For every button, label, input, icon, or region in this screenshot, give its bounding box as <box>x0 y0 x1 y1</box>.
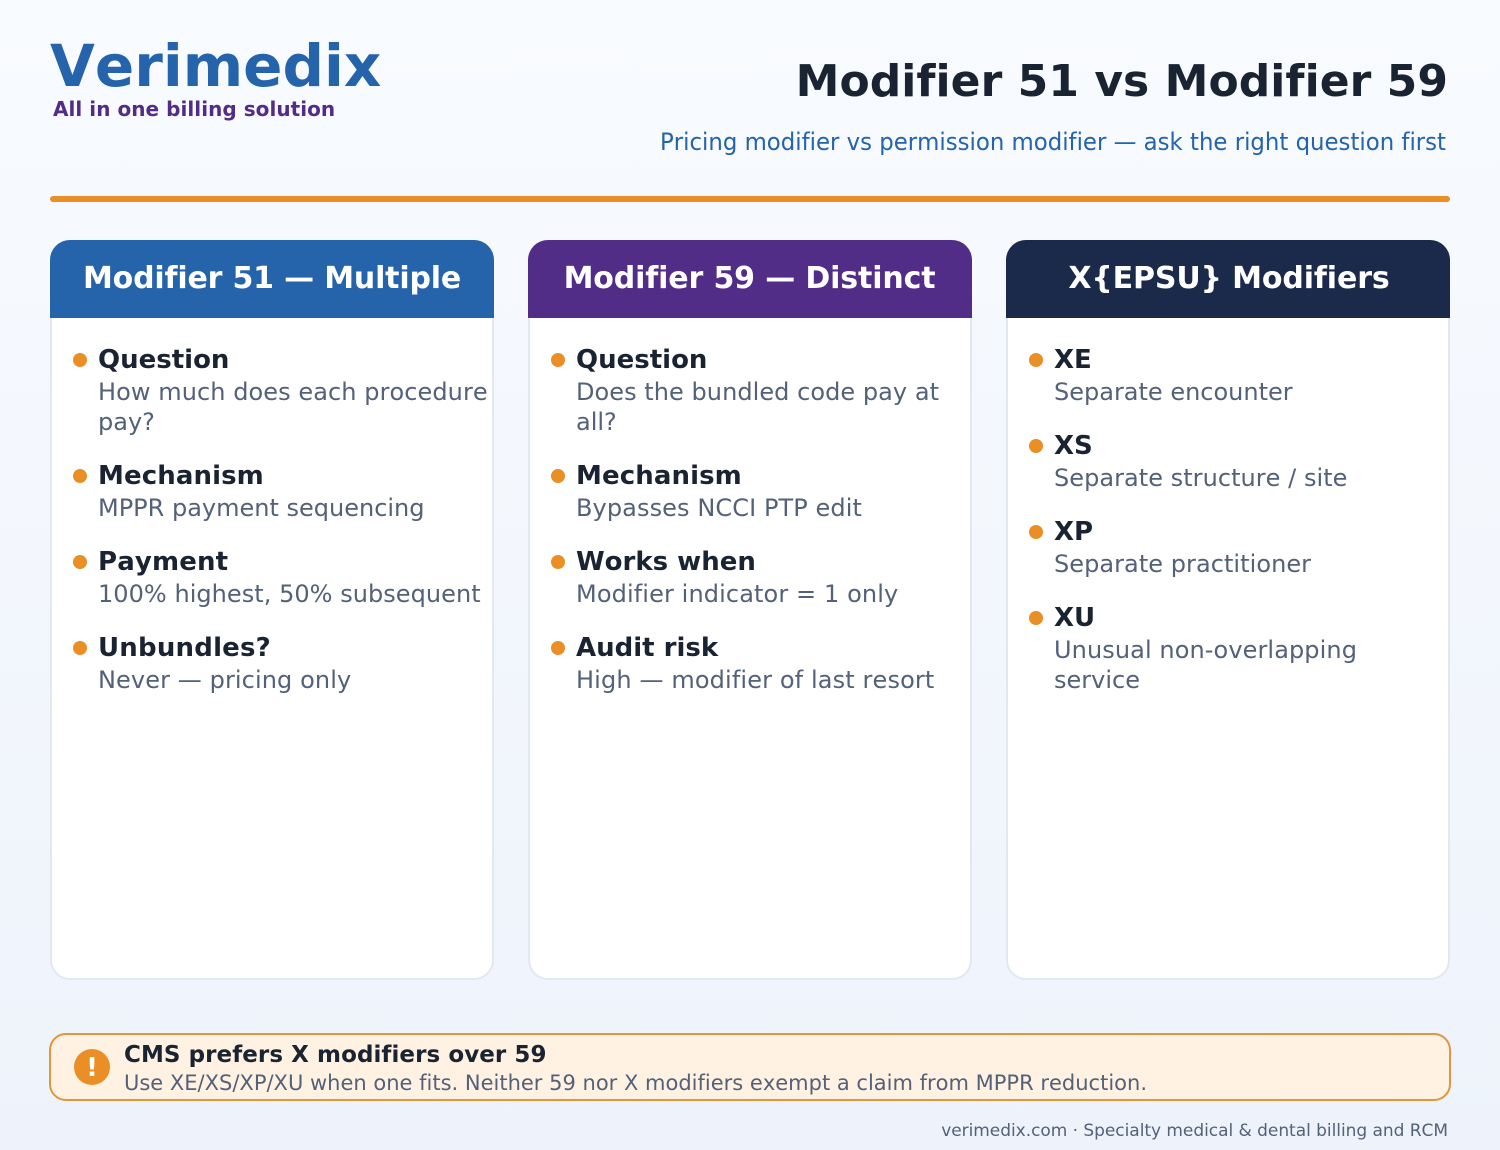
item: Question: Question <box>98 345 229 375</box>
item: Mechanism <box>73 461 424 522</box>
panel header: Modifier 59: Modifier 59 — Distinct <box>564 261 935 296</box>
panel header: X{EPSU}: X{EPSU} Modifiers <box>1068 261 1390 296</box>
item: Works when: Works when <box>576 547 756 577</box>
panel header: Modifier 51: Modifier 51 — Multiple <box>83 261 461 296</box>
item: Payment: 100% highest, 50% subsequent <box>98 580 481 608</box>
item: Unbundles?: Never — pricing only <box>98 666 351 694</box>
item: Unbundles? <box>73 633 351 694</box>
item: XU: service <box>1054 666 1140 694</box>
item: Question: How much does each procedure <box>98 378 488 406</box>
item: XE <box>1029 345 1293 406</box>
tagline: All in one billing solution <box>53 97 335 121</box>
subtitle: Pricing modifier vs permission modifier — ask the right question first <box>660 128 1446 156</box>
item: Question: Question <box>576 345 707 375</box>
item: Works when <box>551 547 898 608</box>
item: Audit risk: High — modifier of last resort <box>576 666 934 694</box>
title: Modifier 51 vs Modifier 59 <box>796 56 1448 107</box>
item: XU: Unusual non-overlapping <box>1054 636 1357 664</box>
item: Works when: Modifier indicator = 1 only <box>576 580 898 608</box>
item: Audit risk <box>551 633 934 694</box>
item: Mechanism: Mechanism <box>98 461 264 491</box>
item: XS <box>1029 431 1347 492</box>
item: Mechanism: Bypasses NCCI PTP edit <box>576 494 862 522</box>
item: XE: XE <box>1054 345 1092 375</box>
item: Question: all? <box>576 408 617 436</box>
icon: warning: ! <box>86 1053 98 1083</box>
logo wordmark: Verimedix <box>50 32 381 100</box>
item: Unbundles?: Unbundles? <box>98 633 271 663</box>
panel: X{EPSU} modifiers <box>1006 240 1450 979</box>
item: XP: XP <box>1054 517 1093 547</box>
item: XP: Separate practitioner <box>1054 550 1311 578</box>
panel: Modifier 59 <box>528 240 972 979</box>
item: Question: pay? <box>98 408 155 436</box>
item: XE: Separate encounter <box>1054 378 1293 406</box>
item: Payment: Payment <box>98 547 228 577</box>
item: XP <box>1029 517 1311 578</box>
item: XS: Separate structure / site <box>1054 464 1347 492</box>
footer: verimedix.com · Specialty medical & dental billing and RCM <box>941 1121 1448 1141</box>
item: XU <box>1029 603 1357 694</box>
orange header rule <box>50 196 1450 202</box>
callout heading: CMS prefers X modifiers over 59 <box>124 1042 547 1068</box>
callout <box>50 1034 1450 1100</box>
callout body: Use XE/XS/XP/XU when one fits. Neither 59 nor X modifiers exempt a claim from MPPR reduction. <box>124 1071 1147 1095</box>
item: Audit risk: Audit risk <box>576 633 719 663</box>
panel header: Modifier 59 <box>528 240 972 318</box>
item: XS: XS <box>1054 431 1093 461</box>
item: Question: Does the bundled code pay at <box>576 378 939 406</box>
panel header: Modifier 51 <box>50 240 494 318</box>
item: Question <box>73 345 488 436</box>
item: Mechanism <box>551 461 862 522</box>
panel header: X{EPSU} <box>1006 240 1450 318</box>
item: XU: XU <box>1054 603 1095 633</box>
item: Payment <box>73 547 481 608</box>
item: Mechanism: MPPR payment sequencing <box>98 494 424 522</box>
icon: warning <box>74 1049 110 1085</box>
panel: Modifier 51 <box>50 240 494 979</box>
item: Question <box>551 345 939 436</box>
item: Mechanism: Mechanism <box>576 461 742 491</box>
